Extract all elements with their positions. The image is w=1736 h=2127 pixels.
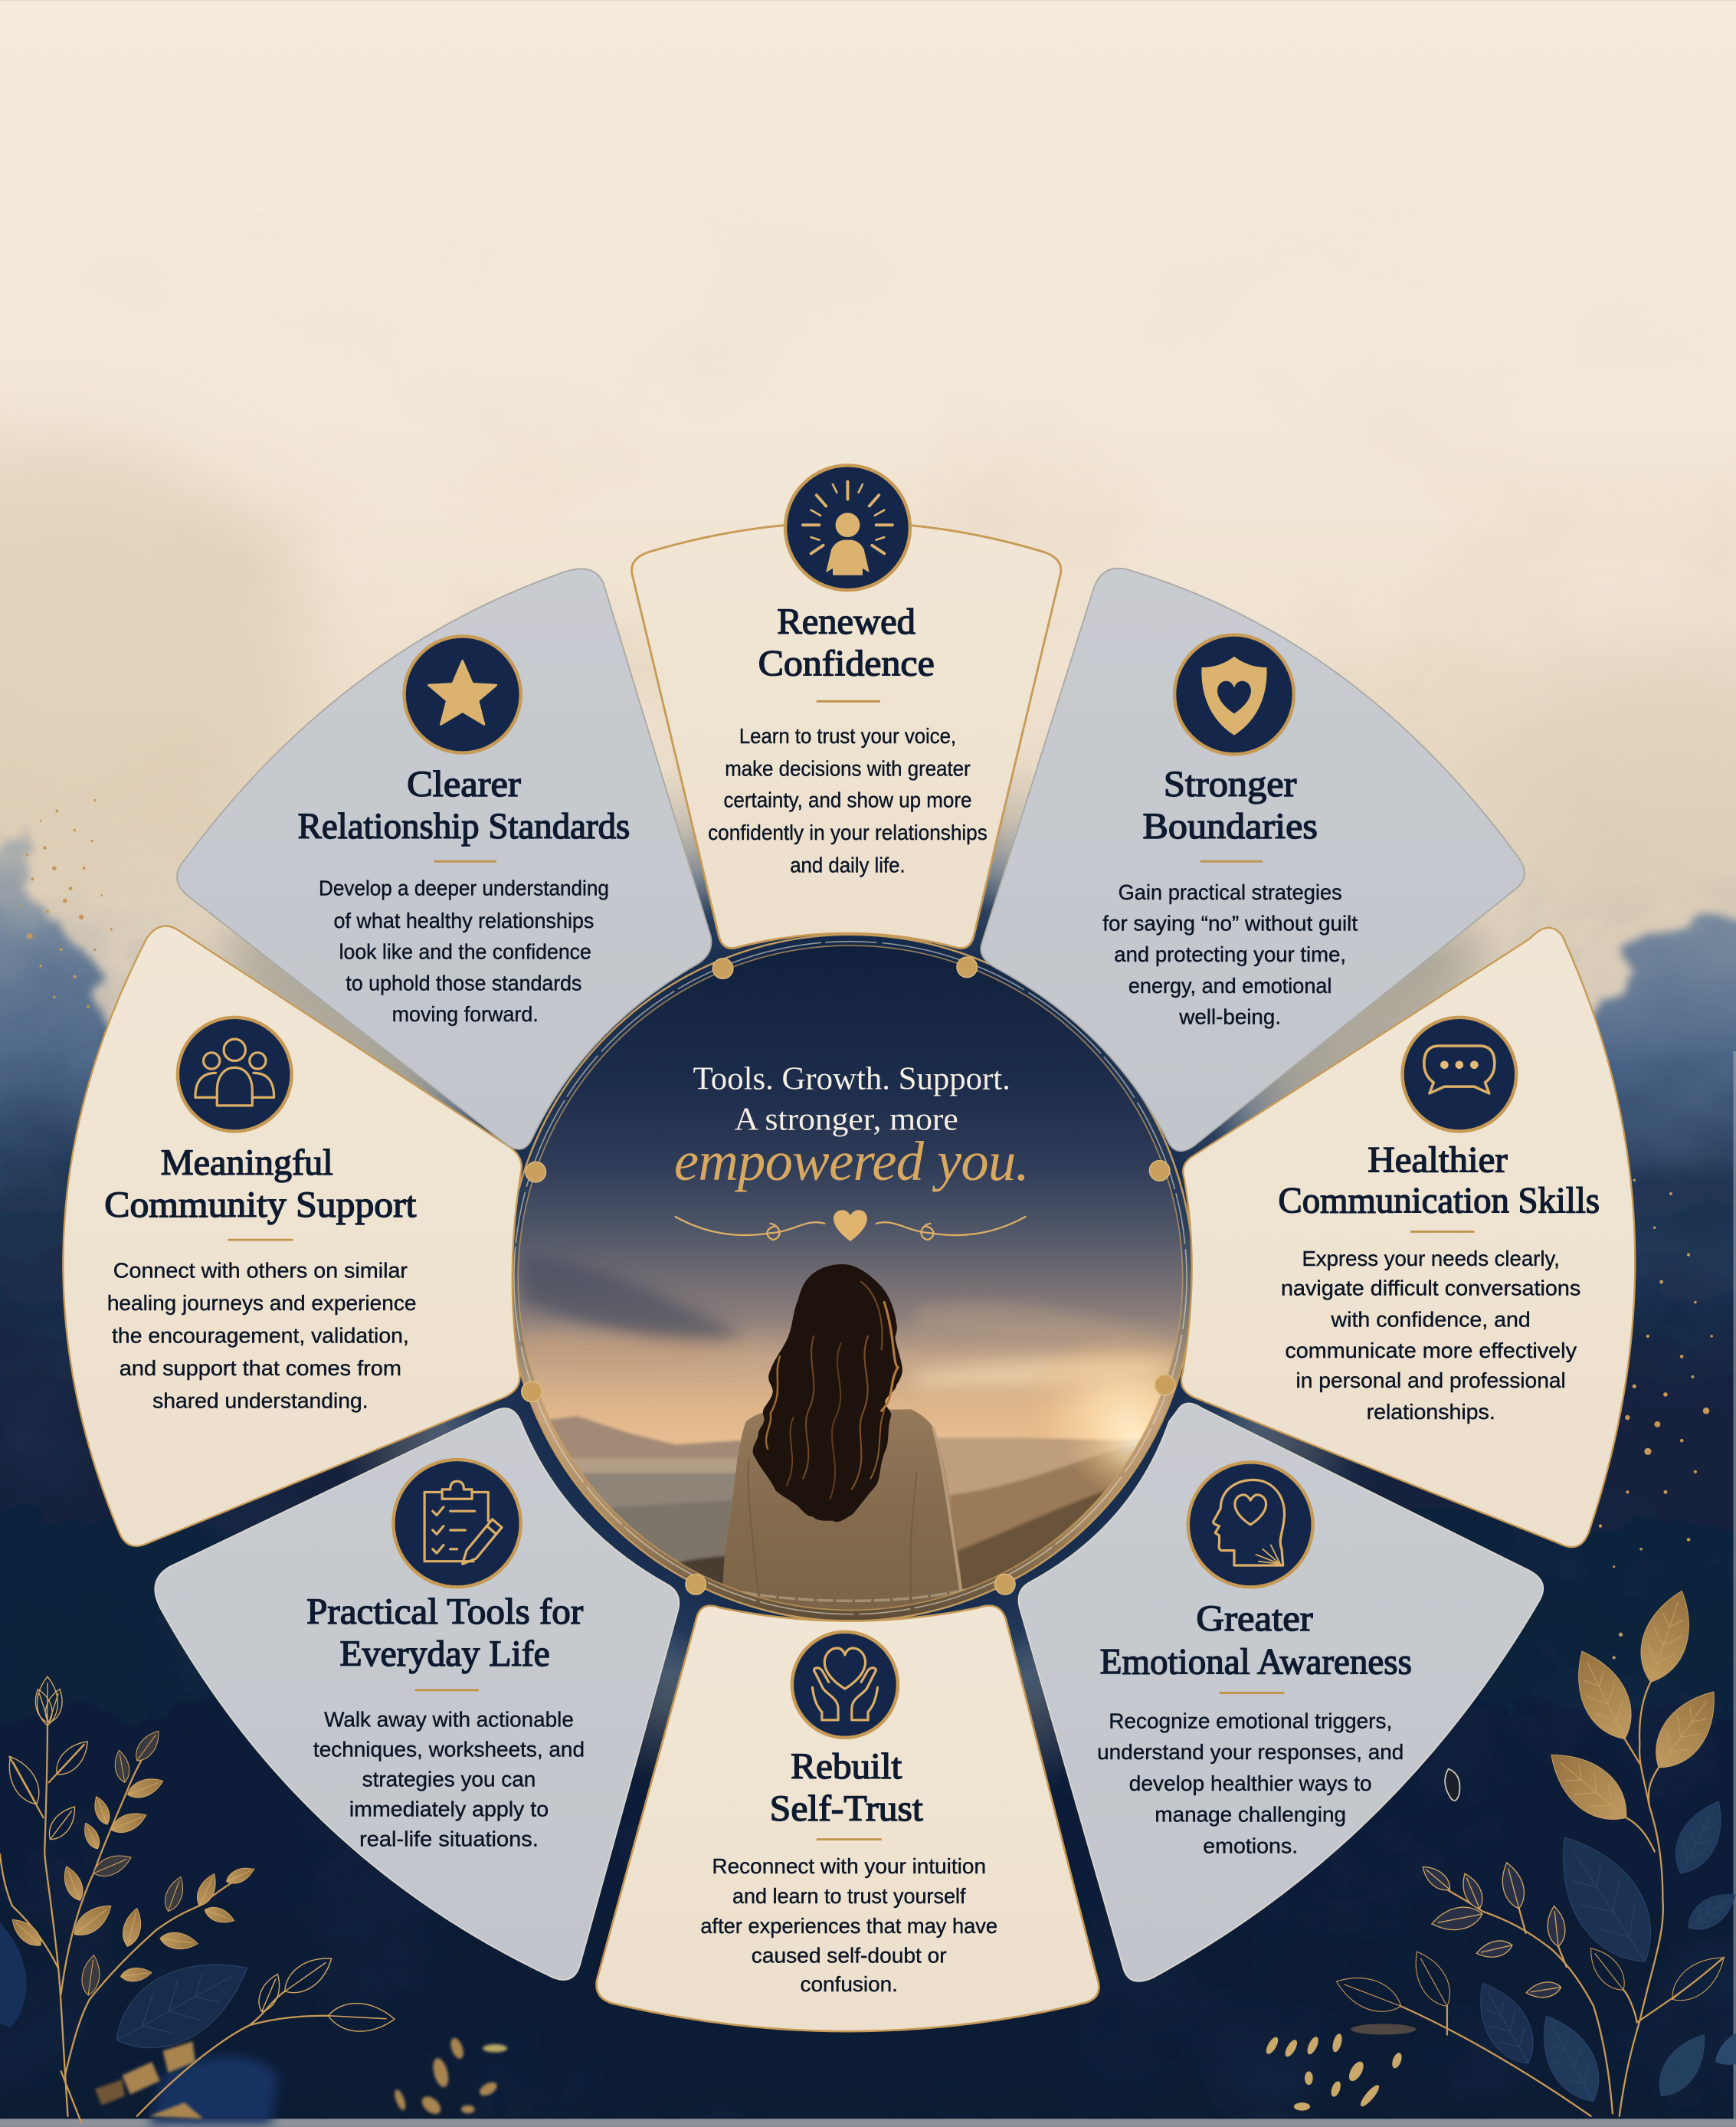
body text: real-life situations. (359, 1827, 539, 1850)
body text: and support that comes from (120, 1356, 401, 1380)
body text: immediately apply to (349, 1798, 549, 1821)
body text: communicate more effectively (1285, 1339, 1577, 1362)
body text: Express your needs clearly, (1302, 1247, 1560, 1270)
body text: certainty, and show up more (723, 788, 971, 811)
heading (758, 601, 935, 684)
heading: Communication Skills (1279, 1181, 1600, 1221)
icon: person with radiating light (785, 465, 910, 590)
body text (700, 1854, 997, 1996)
heading (298, 764, 630, 847)
body text: well-being. (1178, 1005, 1281, 1029)
body text (107, 1259, 416, 1413)
ridges, right (936, 1435, 1194, 1499)
body text: the encouragement, validation, (112, 1324, 409, 1348)
decoration: shading in the gaps between panels (201, 736, 1508, 1821)
body text: Reconnect with your intuition (712, 1854, 986, 1878)
botanical: bottom-left gold sprigs (0, 1676, 507, 2124)
tagline: Tools. Growth. Support. (693, 1061, 1010, 1097)
icon: speech bubble (1403, 1018, 1516, 1132)
heading: Greater (1196, 1598, 1313, 1639)
body text (1281, 1247, 1580, 1424)
heading: Rebuilt (791, 1746, 902, 1787)
body text: and learn to trust yourself (732, 1884, 966, 1908)
center circle: sunset photo and tagline: A stronger, more (735, 1102, 958, 1138)
heading (1100, 1598, 1412, 1683)
body text: Learn to trust your voice, (739, 724, 956, 748)
heading: Community Support (104, 1185, 416, 1225)
body text: develop healthier ways to (1129, 1771, 1372, 1795)
icon: clipboard checklist and pencil (393, 1460, 521, 1587)
panel: Rebuilt Self-Trust (596, 1606, 1099, 2031)
ring connector dots (522, 957, 1175, 1594)
body text: Gain practical strategies (1119, 880, 1342, 904)
heading (770, 1746, 923, 1829)
heading: Practical Tools for (306, 1591, 583, 1632)
heading: Clearer (407, 764, 521, 805)
heading: Renewed (777, 601, 915, 642)
heading: Boundaries (1142, 806, 1318, 847)
photo scene: woman facing the sunset (519, 946, 1182, 1611)
body text: and daily life. (790, 853, 906, 877)
body text: caused self-doubt or (752, 1944, 947, 1968)
icon: head with heart (1188, 1462, 1313, 1587)
heading: Healthier (1368, 1140, 1508, 1181)
script highlight: empowered you. (674, 1130, 1030, 1192)
body text: of what healthy relationships (333, 909, 594, 932)
body text (1097, 1709, 1404, 1857)
body text: in personal and professional (1296, 1368, 1566, 1392)
heading: Everyday Life (339, 1634, 550, 1674)
panel: Renewed Confidence (632, 465, 1061, 949)
botanical: bottom-right gold and blue leaves (1264, 1584, 1736, 2116)
body text: Recognize emotional triggers, (1109, 1709, 1392, 1732)
panel: Practical Tools for Everyday Life (155, 1408, 679, 1980)
icon: star (405, 636, 521, 753)
body text: to uphold those standards (346, 971, 581, 995)
far hills and sea, left (550, 1414, 741, 1460)
body text: manage challenging (1155, 1803, 1346, 1827)
heading: Emotional Awareness (1100, 1642, 1412, 1683)
body text: after experiences that may have (700, 1914, 997, 1938)
body text: relationships. (1367, 1400, 1495, 1424)
body text: strategies you can (362, 1768, 536, 1791)
heading (1279, 1140, 1600, 1221)
heading (1142, 764, 1318, 847)
heading: Stronger (1164, 764, 1297, 805)
gold speckles (19, 799, 1713, 1660)
panel: Clearer Relationship Standards (177, 569, 712, 1149)
body text: Develop a deeper understanding (319, 876, 609, 900)
body text (708, 724, 988, 877)
panel: Stronger Boundaries (981, 569, 1525, 1151)
body text: navigate difficult conversations (1281, 1277, 1580, 1300)
body text: make decisions with greater (725, 757, 971, 781)
flourish with heart (676, 1210, 1025, 1241)
body text: confusion. (800, 1972, 898, 1996)
body text: emotions. (1203, 1834, 1298, 1857)
heading: Relationship Standards (298, 806, 630, 847)
body text: with confidence, and (1331, 1307, 1531, 1331)
body text: techniques, worksheets, and (313, 1738, 585, 1762)
woman: wavy hair (753, 1264, 902, 1522)
body text: look like and the confidence (339, 940, 591, 964)
icon: hands holding heart (792, 1632, 898, 1738)
panel: Healthier Communication Skills (1181, 928, 1635, 1547)
body text: understand your responses, and (1097, 1740, 1404, 1764)
body text: for saying “no” without guilt (1102, 912, 1358, 936)
center circle: sunset photo and tagline (507, 935, 1243, 1627)
body text: energy, and emotional (1128, 974, 1331, 998)
body text: and protecting your time, (1114, 942, 1346, 966)
panel: Meaningful Community Support (63, 926, 522, 1546)
body text: shared understanding. (152, 1389, 368, 1413)
body text (1102, 880, 1358, 1029)
icon: three people (178, 1018, 292, 1132)
heading: Meaningful (161, 1142, 333, 1183)
body text: Connect with others on similar (113, 1259, 408, 1283)
woman: sweater (720, 1409, 965, 1621)
icon: shield with heart (1174, 635, 1294, 754)
heading (306, 1591, 583, 1674)
body text: Walk away with actionable (324, 1708, 574, 1732)
heading (104, 1142, 416, 1225)
body text: healing journeys and experience (107, 1291, 416, 1315)
heading: Self-Trust (770, 1788, 923, 1829)
heading: Confidence (758, 644, 935, 684)
body text (319, 876, 609, 1026)
body text (313, 1708, 585, 1850)
body text: moving forward. (392, 1002, 539, 1026)
body text: confidently in your relationships (708, 821, 988, 844)
panel: Greater Emotional Awareness (1019, 1403, 1543, 1981)
